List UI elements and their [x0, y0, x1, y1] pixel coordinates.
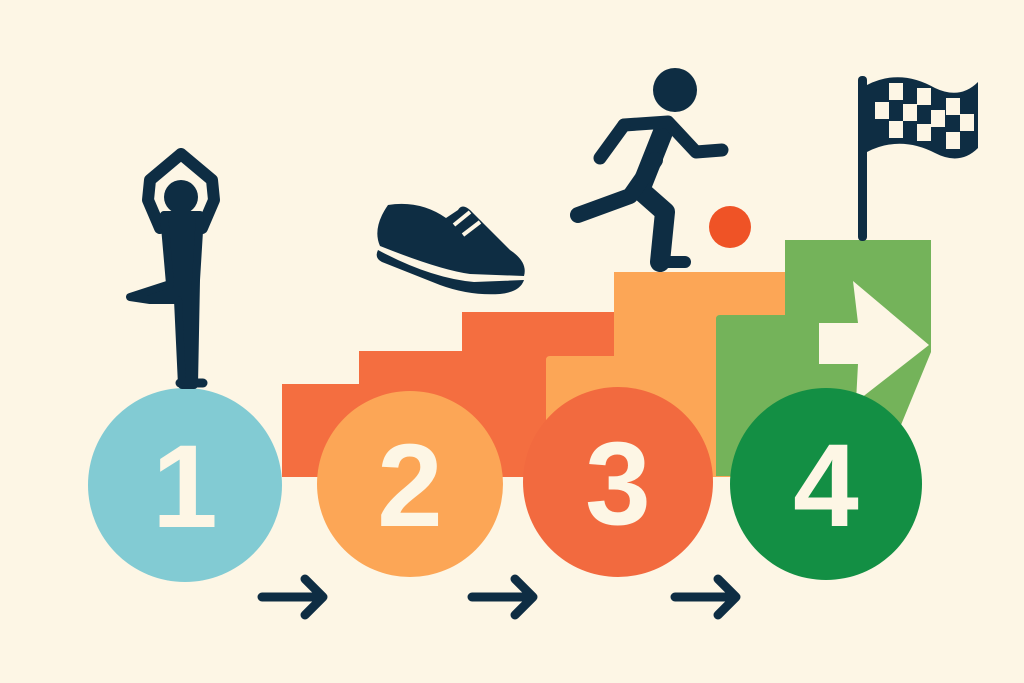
circle 1: 1 [152, 421, 218, 553]
icon: checkered flag [858, 76, 978, 241]
circle 3 [523, 387, 713, 577]
arrow 1 [262, 579, 323, 615]
circle 3: 3 [585, 418, 651, 550]
icon: white arrow [819, 281, 929, 402]
stairs: orange [546, 272, 785, 477]
icon: ball [709, 206, 751, 248]
icon: shoe [377, 200, 525, 294]
stairs: green [716, 240, 931, 476]
icon: yoga figure [130, 154, 214, 385]
circle 2: 2 [377, 420, 443, 552]
circle 4: 4 [793, 420, 859, 552]
circle 4 [730, 388, 922, 580]
circle 1 [88, 388, 282, 582]
arrow 3 [675, 579, 736, 615]
circle 2 [317, 391, 503, 577]
icon: runner [578, 68, 722, 262]
arrow 2 [472, 579, 533, 615]
stairs: red [282, 312, 614, 477]
